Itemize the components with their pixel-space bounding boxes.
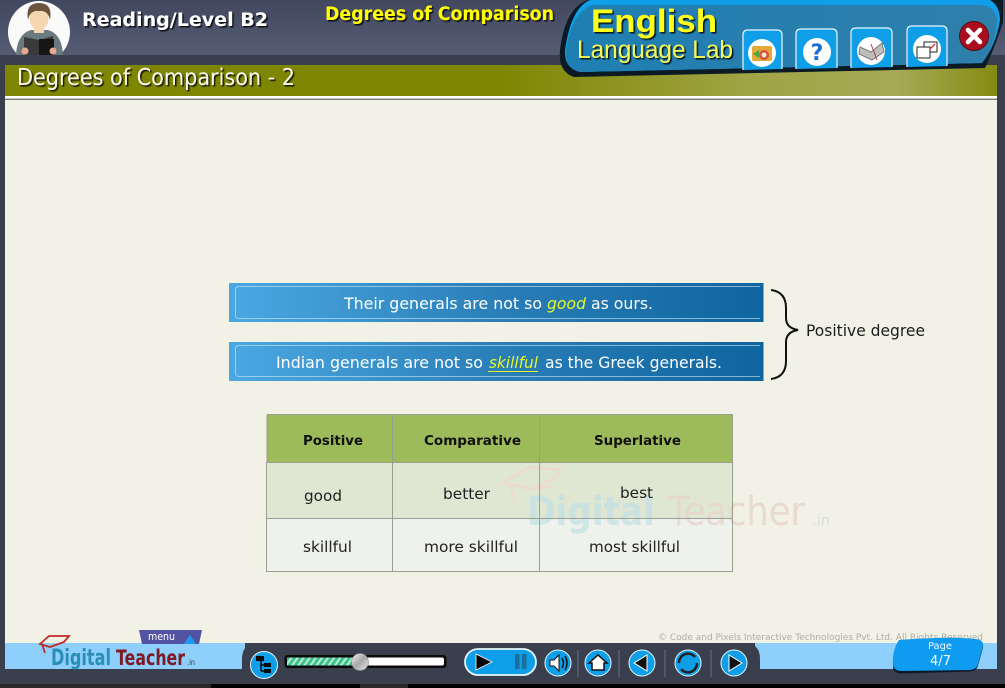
table: degrees of comparison: Comparative xyxy=(424,433,521,449)
sentence banner 2: skillful xyxy=(489,353,539,372)
table: degrees of comparison: best xyxy=(620,484,653,502)
footer band right xyxy=(755,643,997,669)
header bar xyxy=(0,0,1005,55)
page indicator: Page xyxy=(928,641,952,652)
curly brace xyxy=(771,290,798,379)
icon: home xyxy=(585,650,611,676)
heading: Degrees of Comparison (yellow): Degrees of Comparison xyxy=(325,4,554,25)
sentence banner 1: good xyxy=(547,294,587,313)
slide area xyxy=(5,100,997,643)
icon: tree menu button xyxy=(250,652,278,678)
icon: student reading avatar xyxy=(8,1,70,55)
icon: window tab xyxy=(907,26,947,67)
logo: Digital Teacher xyxy=(40,636,195,671)
watermark: Digital Teacher: Teacher xyxy=(667,489,805,535)
table: degrees of comparison: better xyxy=(443,485,491,503)
title band: Degrees of Comparison - 2 xyxy=(5,65,997,96)
logo text: English: English xyxy=(591,3,717,39)
title band: Degrees of Comparison - 2: Degrees of Comparison - 2 xyxy=(17,65,295,91)
table: degrees of comparison: skillful xyxy=(303,538,352,556)
copyright line: © Code and Pixels Interactive Technologies Pvt. Ltd. All Rights Reserved xyxy=(658,633,983,643)
sentence banner 2: as the Greek generals. xyxy=(545,353,722,372)
page indicator xyxy=(893,638,983,674)
sentence banner 1: Their generals are not so xyxy=(343,294,542,313)
table: degrees of comparison: good xyxy=(304,487,342,505)
logo: Digital Teacher: Teacher xyxy=(116,646,185,670)
bottom strip xyxy=(0,684,1005,688)
play / pause pill xyxy=(465,649,536,675)
sentence banner 2 xyxy=(229,342,764,381)
progress slider xyxy=(284,654,446,670)
icon: sound xyxy=(545,650,571,676)
sentence banner 1: as ours. xyxy=(591,294,653,313)
icon: book tab xyxy=(851,28,892,68)
logo text: Language Lab: Language Lab xyxy=(577,36,733,64)
table: degrees of comparison: Positive xyxy=(303,433,363,449)
table: degrees of comparison xyxy=(266,414,830,572)
footer band left xyxy=(5,643,245,669)
logo: Digital Teacher: .in xyxy=(187,658,195,667)
icon: bookmark clock tab xyxy=(743,30,782,70)
panel: English Language Lab toolbar xyxy=(560,0,1003,77)
icon: close button xyxy=(960,22,988,50)
table: degrees of comparison: most skillful xyxy=(589,538,680,556)
heading: Reading/Level B2: Reading/Level B2 xyxy=(82,10,268,31)
icon: next xyxy=(721,650,747,676)
menu tab: menu xyxy=(148,631,175,643)
menu tab xyxy=(139,630,202,644)
watermark: Digital Teacher xyxy=(503,467,830,535)
watermark: Digital Teacher: .in xyxy=(812,513,830,529)
icon: refresh xyxy=(675,650,701,676)
sentence banner 2: Indian generals are not so xyxy=(276,353,483,372)
control bar xyxy=(242,643,760,684)
watermark: Digital Teacher: Digital xyxy=(527,489,655,535)
icon: back xyxy=(629,650,655,676)
table: degrees of comparison: more skillful xyxy=(424,538,518,556)
page indicator: 4/7 xyxy=(930,653,951,669)
table: degrees of comparison: Superlative xyxy=(594,433,681,449)
sentence banner 1 xyxy=(229,283,764,322)
logo: Digital Teacher: Digital xyxy=(51,646,111,671)
label: Positive degree: Positive degree xyxy=(806,321,925,340)
icon: help tab xyxy=(796,29,837,69)
icon: help tab: ? xyxy=(811,41,823,66)
